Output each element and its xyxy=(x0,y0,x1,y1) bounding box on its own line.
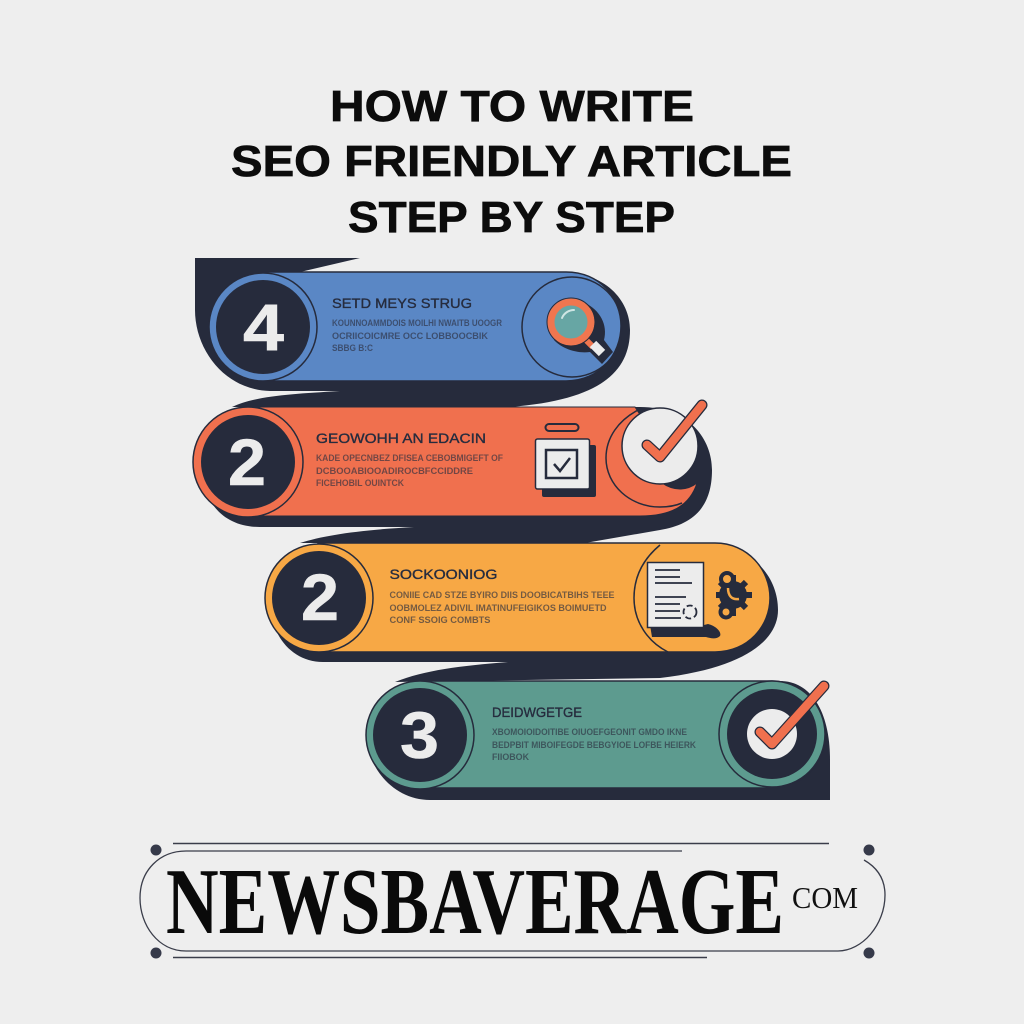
icon: check badge xyxy=(719,681,825,787)
step 2 body text: FICEHOBIL OUINTCK xyxy=(316,478,404,489)
step 2 yellow body text: CONIIE CAD STZE BYIRO DIIS DOOBICATBIHS TEEE xyxy=(390,590,614,601)
yellow pill body xyxy=(318,543,770,652)
step 2 body text: DCBOOABIOOADIROCBFCCIDDRE xyxy=(316,466,473,477)
step 2 yellow body text: CONF SSOIG COMBTS xyxy=(390,615,490,626)
yellow panel shadow ribbon xyxy=(272,543,778,682)
teal pill body xyxy=(420,681,825,788)
step 4 body text: SBBG B:C xyxy=(332,343,373,354)
number badge 3: 3 xyxy=(400,698,439,772)
logo corner dots xyxy=(150,844,874,958)
title: SEO FRIENDLY ARTICLE xyxy=(231,137,792,186)
step 3 body text: FIIOBOK xyxy=(492,752,529,763)
icon: checklist box xyxy=(536,424,596,497)
orange panel shadow ribbon xyxy=(200,407,712,543)
number badge 4 xyxy=(209,273,317,381)
step 4 body text: KOUNNOAMMDOIS MOILHI NWAITB UOOGR xyxy=(332,318,502,329)
step 2 body text: KADE OPECNBEZ DFISEA CEBOBMIGEFT OF xyxy=(316,453,503,464)
number badge 2 xyxy=(265,544,373,652)
number badge 2 xyxy=(193,407,303,517)
title: HOW TO WRITE xyxy=(330,82,694,131)
number badge 2: 2 xyxy=(301,560,339,634)
panel: step 4 blue xyxy=(195,258,630,407)
step 3 body text: XBOMOIOIDOITIBE OIUOEFGEONIT GMDO IKNE xyxy=(492,727,687,738)
step 2 heading: GEOWOHH AN EDACIN xyxy=(316,430,486,446)
panel: step 2 orange xyxy=(193,405,712,543)
title: STEP BY STEP xyxy=(348,193,675,242)
step 2 yellow body text xyxy=(390,590,614,626)
logo: newsbaverage.com xyxy=(140,844,885,958)
number badge 3 xyxy=(366,681,474,789)
number badge 4: 4 xyxy=(243,290,284,364)
logo suffix: COM xyxy=(792,880,858,915)
panel: step 3 teal xyxy=(366,681,830,800)
icon: check badge xyxy=(606,405,702,507)
step 2 yellow body text: OOBMOLEZ ADIVIL IMATINUFEIGIKOS BOIMUETD xyxy=(390,603,607,614)
orange pill body xyxy=(193,407,697,516)
panel: step 2 yellow xyxy=(265,543,778,682)
logo frame xyxy=(140,844,885,958)
blue panel shadow ribbon xyxy=(195,258,630,407)
number badge 2: 2 xyxy=(228,425,266,499)
icon: document and gear xyxy=(634,545,752,652)
blue pill body xyxy=(263,272,621,381)
step 2 yellow heading: SOCKOONIOG xyxy=(390,566,498,582)
teal panel shadow ribbon xyxy=(366,681,830,800)
logo wordmark: NEWSBAVERAGE xyxy=(166,850,784,954)
title xyxy=(231,82,792,242)
step 3 body text xyxy=(492,727,696,763)
step 2 body text xyxy=(316,453,503,489)
step 4 body text: OCRIICOICMRE OCC LOBBOOCBIK xyxy=(332,331,488,342)
step 3 body text: BEDPBIT MIBOIFEGDE BEBGYIOE LOFBE HEIERK xyxy=(492,740,696,751)
icon: magnifier xyxy=(522,277,622,377)
step 3 heading: DEIDWGETGE xyxy=(492,704,582,720)
step 4 heading: SETD MEYS STRUG xyxy=(332,295,472,311)
step 4 body text xyxy=(332,318,502,354)
